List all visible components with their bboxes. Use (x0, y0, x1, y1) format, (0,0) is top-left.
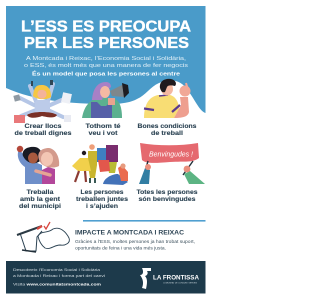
label: totes: Totes les persones (136, 189, 198, 196)
footer text: Descobreix l’Economia Social i Solidària (13, 267, 101, 272)
label: treballa (19, 189, 61, 210)
infographic page (6, 6, 206, 294)
icon: welcome banner (139, 143, 205, 184)
label: les persones: i s’ajuden (86, 203, 118, 210)
icon: two people hugging (17, 146, 59, 184)
label: crear llocs: de treball dignes (14, 130, 72, 137)
title: L’ESS ES PREOCUPA (21, 18, 191, 35)
logo text: LA FRONTISSA (153, 276, 200, 282)
impact heading: IMPACTE A MONTCADA I REIXAC (75, 230, 184, 236)
intro text (24, 56, 188, 77)
footer text: Visita www.comunitatsmontcada.com (13, 282, 102, 286)
panel: footer (6, 261, 206, 294)
label: les persones: Les persones (80, 189, 124, 196)
footer text (13, 267, 105, 286)
label: totes (136, 189, 198, 203)
label: bones condicions: de treball (151, 130, 183, 137)
divider line (83, 220, 206, 222)
impact text: oportunitats de feina i una vida més justa. (75, 245, 166, 250)
label: crear llocs (14, 123, 72, 137)
icon: woman with many arms (13, 80, 72, 123)
label: tothom: veu i vot (88, 130, 118, 137)
label: les persones: treballen juntes (76, 196, 128, 203)
icon: woman with megaphone (82, 82, 129, 118)
icon: man with yellow shirt and ok gesture (144, 79, 190, 118)
logo tagline: COMUNITAT DE CONSUM I SERVEIS (163, 282, 198, 284)
icon: people working together (72, 144, 128, 185)
impact text (75, 239, 195, 250)
title (21, 18, 191, 52)
impact text: Gràcies a l’ESS, moltes persones ja han trobat suport, (75, 239, 195, 244)
label: crear llocs: Crear llocs (24, 123, 62, 130)
logo mark (140, 268, 151, 289)
label: treballa: del municipi (19, 203, 61, 210)
label: treballa: Treballa (26, 189, 54, 196)
banner text: Benvingudes ! (149, 150, 194, 158)
footer text: a Montcada i Reixac i forma part del canvi (13, 273, 105, 278)
label: bones condicions (138, 123, 197, 137)
label: treballa: amb la gent (20, 196, 61, 203)
panel: blue header with wave (6, 6, 206, 113)
intro text: És un model que posa les persones al centre (32, 69, 180, 77)
icon: hand checking map (17, 222, 69, 252)
label: bones condicions: Bones condicions (138, 123, 197, 130)
label: tothom (86, 123, 121, 137)
intro text: A Montcada i Reixac, l’Economia Social i Solidària, (26, 56, 187, 62)
label: les persones (76, 189, 128, 210)
title: PER LES PERSONES (24, 35, 189, 52)
label: tothom: Tothom té (86, 123, 121, 130)
label: totes: són benvingudes (138, 196, 196, 203)
intro text: o ESS, és molt més que una manera de fer negocis (24, 63, 188, 69)
